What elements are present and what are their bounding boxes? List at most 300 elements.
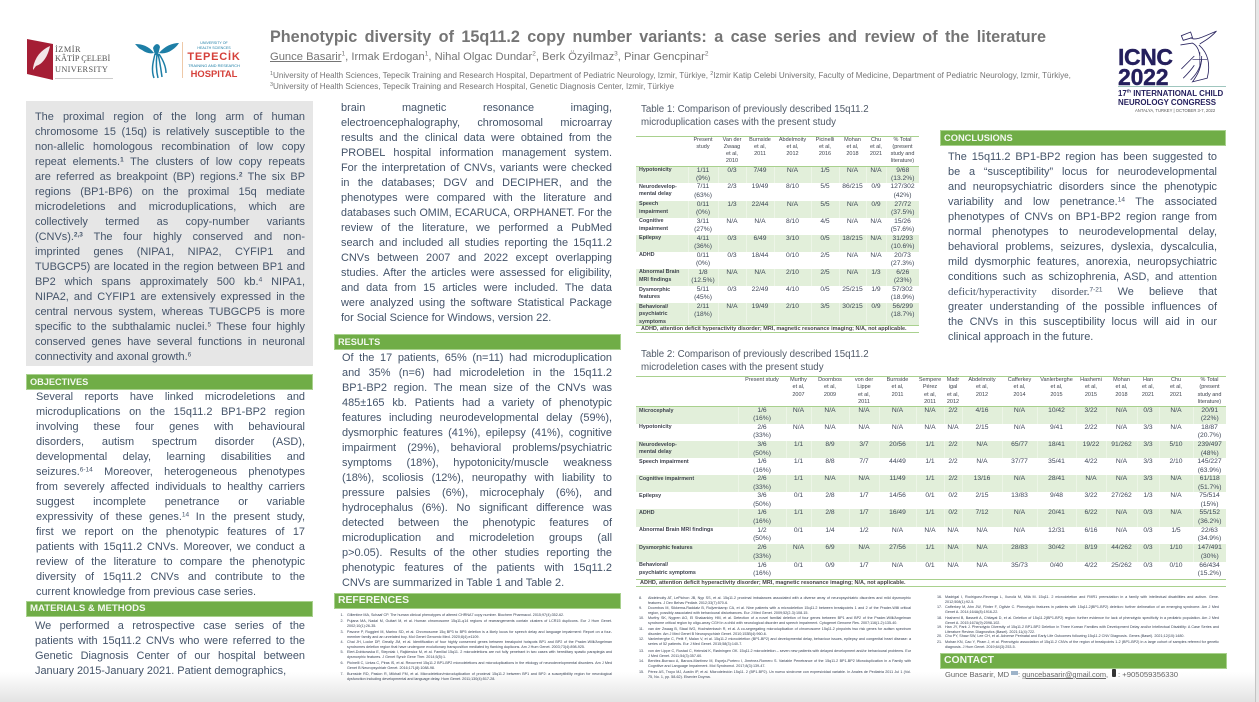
logo: Tepecik Hospital: HOSPITAL [191, 68, 237, 79]
panel: introduction [26, 101, 313, 366]
text block: introduction: conserved genes have several functions in neuronal [35, 336, 305, 348]
text block: results: features including neurodevelopmental delay (59%), [342, 412, 612, 424]
table 1: microduplication comparison: (23%) [894, 277, 912, 284]
table 2: microdeletion comparison: 2021 [1170, 392, 1182, 398]
table 1: microduplication comparison: Chu [871, 136, 881, 142]
table 2: microdeletion comparison: (20.7%) [1198, 432, 1221, 439]
table 2: microdeletion comparison: 1/10 [1169, 544, 1183, 551]
table 2: microdeletion comparison: 2/10 [1169, 458, 1183, 465]
affiliations: 3University of Health Sciences, Tepecik Training and Research Hospital, Genetic Diagnosis Center, Izmir, Türkiye [270, 82, 674, 90]
table 1: microduplication comparison: 86/215 [842, 183, 863, 190]
table 1: microduplication comparison: 6/49 [753, 235, 767, 242]
text block: introduction [35, 110, 305, 362]
table 1: microduplication comparison: impairment [639, 226, 668, 232]
table 2: microdeletion comparison: N/A [793, 424, 804, 431]
references: column two: van der Zwaag B, Staal WG, Hochstenbach R, et al. A co-segregating microduplication of chromosome 15q11.2 pinpoints two risk genes for autism spectrum disorder. Am J Med Genet B Neuropsychiatr Genet. 2010;153B(4):960-6. [648, 627, 911, 636]
table 2: microdeletion comparison: 1/1 [925, 475, 935, 482]
text block: materials and methods, part two [341, 102, 612, 324]
table 2: microdeletion comparison: 6/9 [825, 544, 835, 551]
table 1: microduplication comparison: 18/215 [842, 235, 863, 242]
table 1: microduplication comparison: ADHD [639, 252, 655, 258]
table 1: microduplication comparison: study and [891, 151, 914, 157]
logo: ICNC 2022 congress [1118, 30, 1226, 113]
table 2: microdeletion comparison: Murthy [790, 377, 807, 383]
text: 18. [937, 616, 942, 620]
table 1: microduplication comparison: 7/11 [697, 183, 709, 190]
heading: references: REFERENCES [338, 595, 409, 606]
table 1: microduplication comparison: Burnside [749, 136, 771, 142]
table 1: microduplication comparison: Cognitive [639, 218, 664, 224]
table 2: microdeletion comparison: (33%) [753, 553, 771, 560]
table 2: microdeletion comparison: 35/73 [1011, 562, 1028, 569]
table 2: microdeletion comparison: 9/48 [1050, 492, 1063, 499]
table 2: microdeletion comparison: 8/8 [825, 458, 835, 465]
references: column three: Hashemi B, Bassett A, Chitayat D, et al. Deletion of 15q11.2(BP1-BP2) region: further evidence for lack of phenotypic specificity in a pediatric population. Am J Med Genet A. 2015;167A(9):2098-102. [945, 616, 1219, 625]
logo: Tepecik Hospital: TRAINING AND RESEARCH [188, 63, 240, 68]
authors: Gunce Basarir1, Irmak Erdogan1, Nihal Olgac Dundar2, Berk Özyilmaz3, Pinar Gencpinar2 [270, 50, 708, 63]
text block: materials and methods, part two: PROBEL hospital information management system. [341, 147, 612, 159]
text block: introduction: connectivity and axonal growth.6 [35, 350, 191, 362]
table 2: microdeletion comparison: 1/7 [859, 562, 869, 569]
table 1: microduplication comparison: study [696, 144, 710, 150]
table 2: microdeletion comparison: 0/3 [1143, 544, 1153, 551]
table 2: microdeletion comparison: 1/6 [757, 407, 767, 414]
table 1: microduplication comparison: 0/5 [820, 286, 830, 293]
table 1: microduplication comparison: 0/5 [820, 235, 830, 242]
table 1 title [641, 104, 869, 128]
table 2: microdeletion comparison: (16%) [753, 415, 771, 422]
table 2: microdeletion comparison: 8/9 [825, 441, 835, 448]
table 1: microduplication comparison: literature) [891, 158, 914, 164]
table 2: microdeletion comparison: 2/6 [757, 475, 767, 482]
table 2: microdeletion comparison: N/A [1014, 527, 1025, 534]
table 2: microdeletion comparison: 2014 [1013, 392, 1026, 398]
table 2: microdeletion comparison: 18/87 [1201, 424, 1218, 431]
text block: introduction: chromosome 15 (15q) is relatively susceptible to the [35, 126, 305, 138]
text block: introduction: NIPA2, and CYFIP1 are extensively expressed in the [35, 290, 305, 302]
text block: introduction: microdeletions and microduplications, which are [35, 200, 305, 212]
table 2: microdeletion comparison: 3/3 [1143, 424, 1153, 431]
table 2: microdeletion comparison: et al, [976, 384, 988, 390]
table 1: microduplication comparison: 25/215 [842, 286, 863, 293]
table 2: microdeletion comparison: 27/262 [1111, 492, 1132, 499]
table 2: microdeletion comparison: N/A [924, 527, 936, 534]
references: column three: Cafferkey M, Ahn JW, Flinter F, Ogilvie C. Phenotypic features in patients with 15q11.2(BP1-BP2) deletion: further delineation of an emerging syndrome. Am J Med Genet A. 2014;164A(8):1916-22. [945, 605, 1219, 614]
text block: materials and methods, part two: For the interpretation of CNVs, variants were checked [341, 162, 612, 174]
text block: results: dysmorphic features (41%), epilepsy (41%), cognitive [342, 426, 612, 438]
table 1: microduplication comparison: N/A [754, 269, 766, 276]
table 1: microduplication comparison: et al, [819, 144, 831, 150]
table 2: microdeletion comparison: 1/1 [925, 544, 935, 551]
table 2: microdeletion comparison: N/A [1116, 509, 1127, 516]
table 2: microdeletion comparison: N/A [1014, 509, 1025, 516]
text block: results: symptoms (18%), hypotonicity/muscle weakness [342, 456, 612, 468]
table 2: microdeletion comparison: et al, [1142, 384, 1154, 390]
references: column one [340, 613, 612, 681]
table 1: microduplication comparison: (36%) [694, 243, 712, 250]
table 2: microdeletion comparison: (22%) [1201, 415, 1219, 422]
table 2: microdeletion comparison: N/A [858, 475, 870, 482]
table 2: microdeletion comparison: 4/22 [1084, 562, 1098, 569]
references: column two: Abdelmoity AT, LePichon JB, Nyp SS, et al. 15q11.2 proximal imbalances associated with a diverse array of neuropsychiatric disorders and mild dysmorphic features. J Dev Behav Pediatr. 2012;33(7):570-6. [648, 596, 911, 605]
text block: introduction: central nervous system, whereas TUBGCP5 is more [35, 306, 305, 318]
references: column one: Chai JH, Locke DP, Greally JM, et al. Identification of four highly conserved genes between breakpoint hotspots BP1 and BP2 of the Prader-Willi/Angelman syndromes deletion region that have undergone evolutionary transposition mediated by flanking duplicons. Am J Hum Genet. 2003;73(4):898-925. [347, 640, 612, 649]
table 2: microdeletion comparison: 2021 [1142, 392, 1154, 398]
table 1: microduplication comparison: N/A [870, 252, 882, 259]
text block: introduction: TUBGCP5) are located in the region between BP1 and [35, 260, 305, 272]
table 1 footnote: ADHD, attention deficit hyperactivity disorder; MRI, magnetic resonance imaging; N/A, not applicable. [641, 326, 907, 332]
table 2: microdeletion comparison: N/A [1014, 407, 1025, 414]
table 2: microdeletion comparison: 2011 [924, 399, 936, 405]
table 1: microduplication comparison: (present [892, 144, 913, 150]
table 1: microduplication comparison: 0/10 [786, 252, 799, 259]
text block: conclusions: behavioral problems, seizures, dyslexia, dyscalculia, [948, 240, 1217, 252]
table 2: microdeletion comparison: 3/7 [859, 441, 869, 448]
table 1: microduplication comparison: 2021 [870, 151, 882, 157]
table 1 title: Table 1: Comparison of previously described 15q11.2 [641, 104, 869, 114]
table 1: microduplication comparison: 18/44 [752, 252, 768, 259]
table 2: microdeletion comparison: 6/16 [1084, 527, 1098, 534]
table 2: microdeletion comparison: (16%) [753, 518, 771, 525]
table 2: microdeletion comparison: et al, [947, 392, 959, 398]
text block: materials and methods, part two: in the databases; DGV and DECIPHER, and the [341, 177, 612, 189]
text: 8. [639, 596, 642, 600]
logo: ICNC 2022 congress: 17th INTERNATIONAL CHILD [1118, 88, 1223, 98]
table 2: microdeletion comparison: 28/83 [1011, 544, 1028, 551]
table 2: microdeletion comparison: 2012 [947, 399, 959, 405]
table 2: microdeletion comparison: 0/3 [1143, 562, 1153, 569]
table 1: microduplication comparison: 2011 [754, 151, 766, 157]
text block: introduction: are referred as breakpoint (BP) regions.2 The six BP [35, 170, 305, 182]
table 2: microdeletion comparison: N/A [947, 527, 959, 534]
table 2: microdeletion comparison: N/A [947, 562, 959, 569]
table 2: microdeletion comparison: N/A [858, 424, 870, 431]
table 2: microdeletion comparison: Abdelmoity [968, 377, 996, 383]
conclusions heading: CONCLUSIONS [944, 133, 1013, 143]
table 2: microdeletion comparison: 4/22 [1084, 458, 1098, 465]
table 2 footnote [636, 579, 1226, 587]
table 2: microdeletion comparison: 61/118 [1200, 475, 1220, 482]
text block: materials and methods, part one: January 2015-January 2021. Patient demographics, [35, 664, 286, 676]
table 1: microduplication comparison: et al, [870, 144, 882, 150]
table 2: microdeletion comparison: 13/83 [1011, 492, 1028, 499]
table 1: microduplication comparison: 5/11 [697, 286, 709, 293]
text block: results: (18%), scoliosis (12%), neuropathy with liability to [342, 472, 612, 484]
table 1: microduplication comparison: features [639, 294, 660, 300]
table 2: microdeletion comparison: (present [1199, 384, 1220, 390]
text: 14. [639, 659, 644, 663]
table 2: microdeletion comparison: Hypotonicity [639, 424, 672, 430]
table 2: microdeletion comparison: Madr [947, 377, 959, 383]
text block: materials and methods, part two: results and the clinical data were obtained from the [341, 132, 612, 144]
text block: conclusions: mild dysmorphic features, anorexia, neuropsychiatric [948, 256, 1217, 268]
contact details: : guncebasarir@gmail.com, [1018, 670, 1108, 679]
table 1: microduplication comparison: 2/10 [786, 269, 799, 276]
table 2: microdeletion comparison: 1/2 [859, 527, 869, 534]
table 1: microduplication comparison: 15/26 [894, 218, 911, 225]
table 2: microdeletion comparison: 25/262 [1111, 562, 1132, 569]
table 2: microdeletion comparison: 0/1 [794, 562, 803, 569]
table 2: microdeletion comparison: N/A [1116, 475, 1127, 482]
table 1: microduplication comparison: 5/5 [820, 201, 830, 208]
heading: materials and methods: MATERIALS & METHODS [30, 603, 145, 614]
table 2: microdeletion comparison: Burnside [887, 377, 908, 383]
table 1: microduplication comparison: (45%) [694, 294, 712, 301]
table 2: microdeletion comparison: (63.9%) [1198, 467, 1221, 474]
table 1: microduplication comparison: 1/3 [871, 269, 881, 276]
table 1: microduplication comparison: 0/11 [697, 252, 709, 259]
table 2: microdeletion comparison: et al, [1170, 384, 1182, 390]
text block: introduction: collectively termed as copy-number variants [35, 216, 305, 228]
text block: conclusions: be a “susceptibility” locus for neurodevelopmental [948, 166, 1217, 178]
text: 10. [639, 616, 644, 620]
table 1: microduplication comparison: N/A [787, 167, 798, 174]
text block: objectives: expressivity of these genes.14 In the present study, [36, 511, 305, 523]
table 2: microdeletion comparison: et al, [1014, 384, 1025, 390]
table 2: microdeletion comparison: 2/6 [757, 544, 767, 551]
table 2: microdeletion comparison: 0/40 [1050, 562, 1063, 569]
table 2: microdeletion comparison: (50%) [753, 450, 771, 457]
table 1: microduplication comparison: 19/49 [752, 303, 768, 310]
table 2: microdeletion comparison: Hashemi [1080, 377, 1102, 383]
text block: results: microduplication and microdeletion groups (all [342, 532, 612, 544]
table 2: microdeletion comparison: 4/16 [975, 407, 989, 414]
table 1: microduplication comparison: N/A [787, 201, 798, 208]
table 2: microdeletion comparison: 0/2 [948, 509, 958, 516]
text block: conclusions [948, 150, 1218, 342]
references: column one: Pujana MA, Nadal M, Guitart M, et al. Human chromosome 15q11-q14 regions of rearrangements contain clusters of LCR15 duplicons. Eur J Hum Genet. 2002;10(1):26-35. [347, 619, 612, 628]
text: 2. [340, 619, 344, 623]
table 2: microdeletion comparison: N/A [858, 544, 870, 551]
text block: objectives: suggest incomplete penetrance or variable [36, 496, 305, 508]
table 2: microdeletion comparison: von der [855, 377, 873, 383]
table 2: microdeletion comparison: (51.7%) [1198, 484, 1221, 491]
contact details [945, 669, 1178, 679]
table 2: microdeletion comparison: 2007 [792, 392, 805, 398]
table 1: microduplication comparison: 2/5 [820, 269, 830, 276]
references: column two: Doornbos M, Sikkema-Raddatz B, Ruijvenkamp CA, et al. Nine patients with a microdeletion 15q11.2 between breakpoints 1 and 2 of the Prader-Willi critical region, possibly associated with behavioural disturbances. Eur J Med Genet. 2009;52(2-3):108-15. [648, 606, 911, 615]
table 2: microdeletion comparison: % Total [1201, 377, 1218, 383]
logo: Izmir Katip Celebi University: İZMİR [55, 45, 81, 54]
logo: Tepecik Hospital: HEALTH SCIENCES [197, 46, 231, 50]
table 2: microdeletion comparison: N/A [1170, 475, 1182, 482]
table 1: microduplication comparison: (12.5%) [691, 277, 715, 284]
icon: phone [1112, 669, 1116, 677]
table 2: microdeletion comparison: 2018 [1115, 392, 1128, 398]
text block: results: impairment (29%), behavioral problems/psychiatric [342, 442, 612, 454]
table 1: microduplication comparison: 2018 [846, 151, 859, 157]
table 2: microdeletion comparison: 0/1 [925, 492, 935, 499]
table 2: microdeletion comparison: 1/7 [859, 492, 869, 499]
table 2: microdeletion comparison: N/A [1170, 492, 1182, 499]
table 2: microdeletion comparison: 2/8 [825, 509, 835, 516]
table 2: microdeletion comparison: N/A [1116, 458, 1127, 465]
table 2: microdeletion comparison: 3/6 [757, 441, 767, 448]
table 2: microdeletion comparison: psychiatric symptoms [639, 570, 696, 576]
table 1: microduplication comparison: 4/10 [786, 286, 799, 293]
table 2: microdeletion comparison: et al, [1116, 384, 1127, 390]
text block: results: hydrocephalus (6%). No significant difference was [342, 502, 612, 514]
table 1: microduplication comparison: 5/5 [820, 183, 830, 190]
logo: Tepecik Hospital [135, 41, 241, 79]
table 2: microdeletion comparison: 2011 [892, 392, 903, 398]
text block: materials and methods, part two: brain magnetic resonance imaging, [341, 102, 612, 114]
text block: materials and methods, part one: We performed a retrospective case series of the [35, 620, 305, 632]
table 2 footnote: ADHD, attention deficit hyperactivity disorder; MRI, magnetic resonance imaging; N/A, not applicable. [640, 580, 906, 586]
table 2: microdeletion comparison: 37/77 [1011, 458, 1028, 465]
table 2: microdeletion comparison: 2/15 [975, 424, 989, 431]
table 2: microdeletion comparison: (15.2%) [1198, 570, 1221, 577]
table 1: microduplication comparison: N/A [847, 201, 858, 208]
heading: materials and methods [26, 601, 313, 617]
table 2: microdeletion comparison: 3/3 [1143, 475, 1153, 482]
table 2: microdeletion comparison: 14/56 [889, 492, 906, 499]
table 2: microdeletion comparison: 3/3 [1143, 441, 1153, 448]
table 2: microdeletion comparison: N/A [947, 544, 959, 551]
text block: conclusions: phenotypes of CNVs on BP1-BP2 region range from [948, 210, 1217, 222]
table 2 title: Table 2: Comparison of previously described 15q11.2 [641, 348, 869, 360]
table 2: microdeletion comparison: 9/41 [1050, 424, 1063, 431]
table 1: microduplication comparison: 4/5 [820, 218, 830, 225]
table 2: microdeletion comparison: N/A [824, 407, 836, 414]
text: 20. [937, 634, 942, 638]
table 1: microduplication comparison: 2/5 [820, 252, 830, 259]
table 1: microduplication comparison: 0/9 [871, 183, 881, 190]
text block: conclusions: greater understanding of the possible influences of [948, 300, 1217, 312]
table 2: microdeletion comparison: (30%) [1201, 553, 1219, 560]
table 2: microdeletion comparison: 8/19 [1084, 544, 1098, 551]
text block: materials and methods, part two: search and included all studies reporting the 15q11.2 [341, 237, 612, 249]
text block: results: 485±165 kb. Patients had a variety of phenotypic [342, 396, 612, 408]
table 2: microdeletion comparison: N/A [947, 424, 959, 431]
table 2: microdeletion comparison: N/A [892, 527, 903, 534]
icon: email [1011, 671, 1018, 675]
table 2: microdeletion comparison: 12/31 [1048, 527, 1065, 534]
references: column two: Pérez AS, Troyo MJ, Austín IP, et al. Microdeleción 15q11. 2 (BP1-BP2). Un nuevo síndrome con expresividad variable. In Anales de Pediatría 2011 Jul 1 (Vol. 75, No. 1, pp. 58-62). Elsevier Doyma. [648, 670, 911, 679]
table 1: microduplication comparison: 6/26 [896, 269, 909, 276]
table 2: microdeletion comparison: 55/152 [1200, 509, 1220, 516]
text block: introduction: (CNVs).2,3 The four highly conserved and non- [35, 230, 305, 242]
logo: ICNC 2022 congress: ANTALYA, TURKEY | OCTOBER 3-7, 2022 [1135, 108, 1215, 113]
table 2: microdeletion comparison: N/A [892, 424, 903, 431]
table 2: microdeletion comparison: 1/1 [794, 509, 803, 516]
table 2: microdeletion comparison: N/A [976, 562, 988, 569]
table 2: microdeletion comparison: Cognitive impairment [639, 476, 694, 482]
text block: materials and methods, part two: were analyzed using the software Statistical Package [341, 297, 612, 309]
text: 21. [937, 640, 942, 644]
table 2: microdeletion comparison: et al, [858, 392, 870, 398]
table 1: microduplication comparison [636, 136, 919, 326]
heading: results [334, 334, 621, 350]
references: column three: Han JY, Park J. Phenotypic Diversity of 15q11.2 BP1-BP2 Deletion in Three Korean Families with Development Delay and/or Intellectual Disability: A Case Series and Literature Review. Diagnostics (Basel). 2021;11(4):722. [945, 625, 1219, 634]
table 1: microduplication comparison: N/A [726, 269, 738, 276]
table 1: microduplication comparison: N/A [847, 269, 858, 276]
text block: introduction: The proximal region of the long arm of human [35, 110, 305, 122]
table 2 title [641, 348, 869, 372]
table 2: microdeletion comparison: 19/22 [1083, 441, 1099, 448]
table 2: microdeletion comparison: 0/3 [1143, 407, 1153, 414]
table 1: microduplication comparison: (0%) [696, 209, 710, 216]
table 2: microdeletion comparison: 145/227 [1197, 458, 1222, 465]
table 2: microdeletion comparison: 2/2 [948, 458, 958, 465]
heading: contact: CONTACT [944, 655, 994, 666]
table 2: microdeletion comparison: 20/56 [889, 441, 906, 448]
table 1: microduplication comparison: Epilepsy [639, 235, 661, 241]
logo: Tepecik Hospital: TEPECİK [187, 51, 241, 63]
table 2: microdeletion comparison: 1/4 [825, 527, 835, 534]
table 2: microdeletion comparison: 0/3 [1143, 509, 1153, 516]
table 1 title: microduplication cases with the present study [641, 116, 836, 128]
text block: materials and methods, part two: CNVs between 2007 and 2022 except overlapping [341, 252, 612, 264]
table 2: microdeletion comparison: 13/16 [974, 475, 990, 482]
table 2: microdeletion comparison: 66/434 [1199, 562, 1220, 569]
table 2: microdeletion comparison: 0/2 [948, 492, 958, 499]
text block: conclusions: normal phenotypes to neurodevelopmental delay, [948, 226, 1217, 238]
table 2: microdeletion comparison: 147/491 [1198, 544, 1222, 551]
text block: results: phenotypic features of the patients with 15q11.2 [342, 562, 612, 574]
table 2: microdeletion comparison: N/A [976, 544, 988, 551]
references: column two: von der Lippe C, Rustad C, Heimdal K, Rødningen OK. 15q11.2 microdeletion – seven new patients with delayed development and/or behavioural problems. Eur J Med Genet. 2011;54(3):357-60. [648, 649, 911, 658]
table 1: microduplication comparison: (13.2%) [891, 175, 914, 182]
table 2: microdeletion comparison [636, 376, 1226, 579]
table 2: microdeletion comparison: Vanlerberghe [1040, 377, 1073, 383]
table 1: microduplication comparison: Present [694, 136, 712, 142]
table 2: microdeletion comparison: et al, [1085, 384, 1097, 390]
text block: results: detected between the phenotypic features of [342, 516, 612, 528]
table 1: microduplication comparison: psychiatric [639, 311, 667, 317]
table 2: microdeletion comparison: 5/10 [1169, 441, 1183, 448]
table 1: microduplication comparison: N/A [726, 303, 738, 310]
text block: materials and methods, part one: patients with 15q11.2 CNVs who were referred to the [35, 634, 305, 646]
table 2: microdeletion comparison: 91/262 [1111, 441, 1132, 448]
table 1: microduplication comparison: 9/68 [896, 167, 909, 174]
table 1: microduplication comparison: Zwaag [724, 144, 740, 150]
table 2: microdeletion comparison: 0/9 [825, 562, 835, 569]
table 2: microdeletion comparison: N/A [1116, 527, 1127, 534]
table 2: microdeletion comparison: 2/2 [948, 475, 958, 482]
text block: objectives [36, 391, 305, 598]
table 1: microduplication comparison: 127/302 [890, 183, 915, 190]
table 1: microduplication comparison: 0/3 [727, 286, 737, 293]
text block: conclusions: and neuropsychiatric disorders since the phenotypic [948, 180, 1217, 192]
logo: Tepecik Hospital: UNIVERSITY OF [200, 41, 228, 45]
table 1: microduplication comparison: 19/49 [752, 183, 768, 190]
table 1: microduplication comparison: 30/215 [842, 303, 863, 310]
table 1: microduplication comparison: Hypotonicity [639, 167, 672, 173]
text block: introduction: specific to the subthalamic nuclei.5 These four highly [35, 320, 305, 332]
table 2: microdeletion comparison: 3/3 [1143, 458, 1153, 465]
table 2: microdeletion comparison: 3/22 [1084, 492, 1098, 499]
table 1: microduplication comparison: 0/3 [727, 167, 737, 174]
table 2: microdeletion comparison: N/A [892, 407, 903, 414]
table 2: microdeletion comparison: 27/56 [889, 544, 906, 551]
references: column one: Burnside RD, Pasion R, Mikhail FM, et al. Microdeletion/microduplication of proximal 15q11.2 between BP1 and BP2: a susceptibility region for neurological dysfunction including developmental and language delay. Hum Genet. 2011;130(4):517-28. [347, 672, 612, 681]
text block: introduction: non-allelic homologous recombination of low copy [35, 140, 305, 152]
table 2: microdeletion comparison: 2015 [1085, 392, 1097, 398]
table 2: microdeletion comparison: 239/497 [1198, 441, 1222, 448]
table 1: microduplication comparison: 8/10 [786, 218, 799, 225]
text block: objectives: Several reports have linked microdeletions and [36, 391, 305, 403]
table 2: microdeletion comparison: 1/6 [757, 458, 767, 465]
text block: objectives: first we report on the phenotypic features of 17 [36, 526, 305, 538]
table 2: microdeletion comparison: 1/1 [925, 441, 935, 448]
table 1: microduplication comparison: N/A [870, 235, 882, 242]
table 1: microduplication comparison: (42%) [894, 192, 911, 199]
table 2: microdeletion comparison: Sempere [919, 377, 941, 383]
references: column three: Chu PY, Shaw SW, Lee CH, et al. Adverse Perinatal and Early Life Outcomes following 15q11.2 CNV Diagnosis. Genes (Basel). 2021;12(10):1480. [945, 634, 1184, 638]
table 1: microduplication comparison: et al, [787, 144, 798, 150]
table 1: microduplication comparison: (63%) [694, 192, 712, 199]
